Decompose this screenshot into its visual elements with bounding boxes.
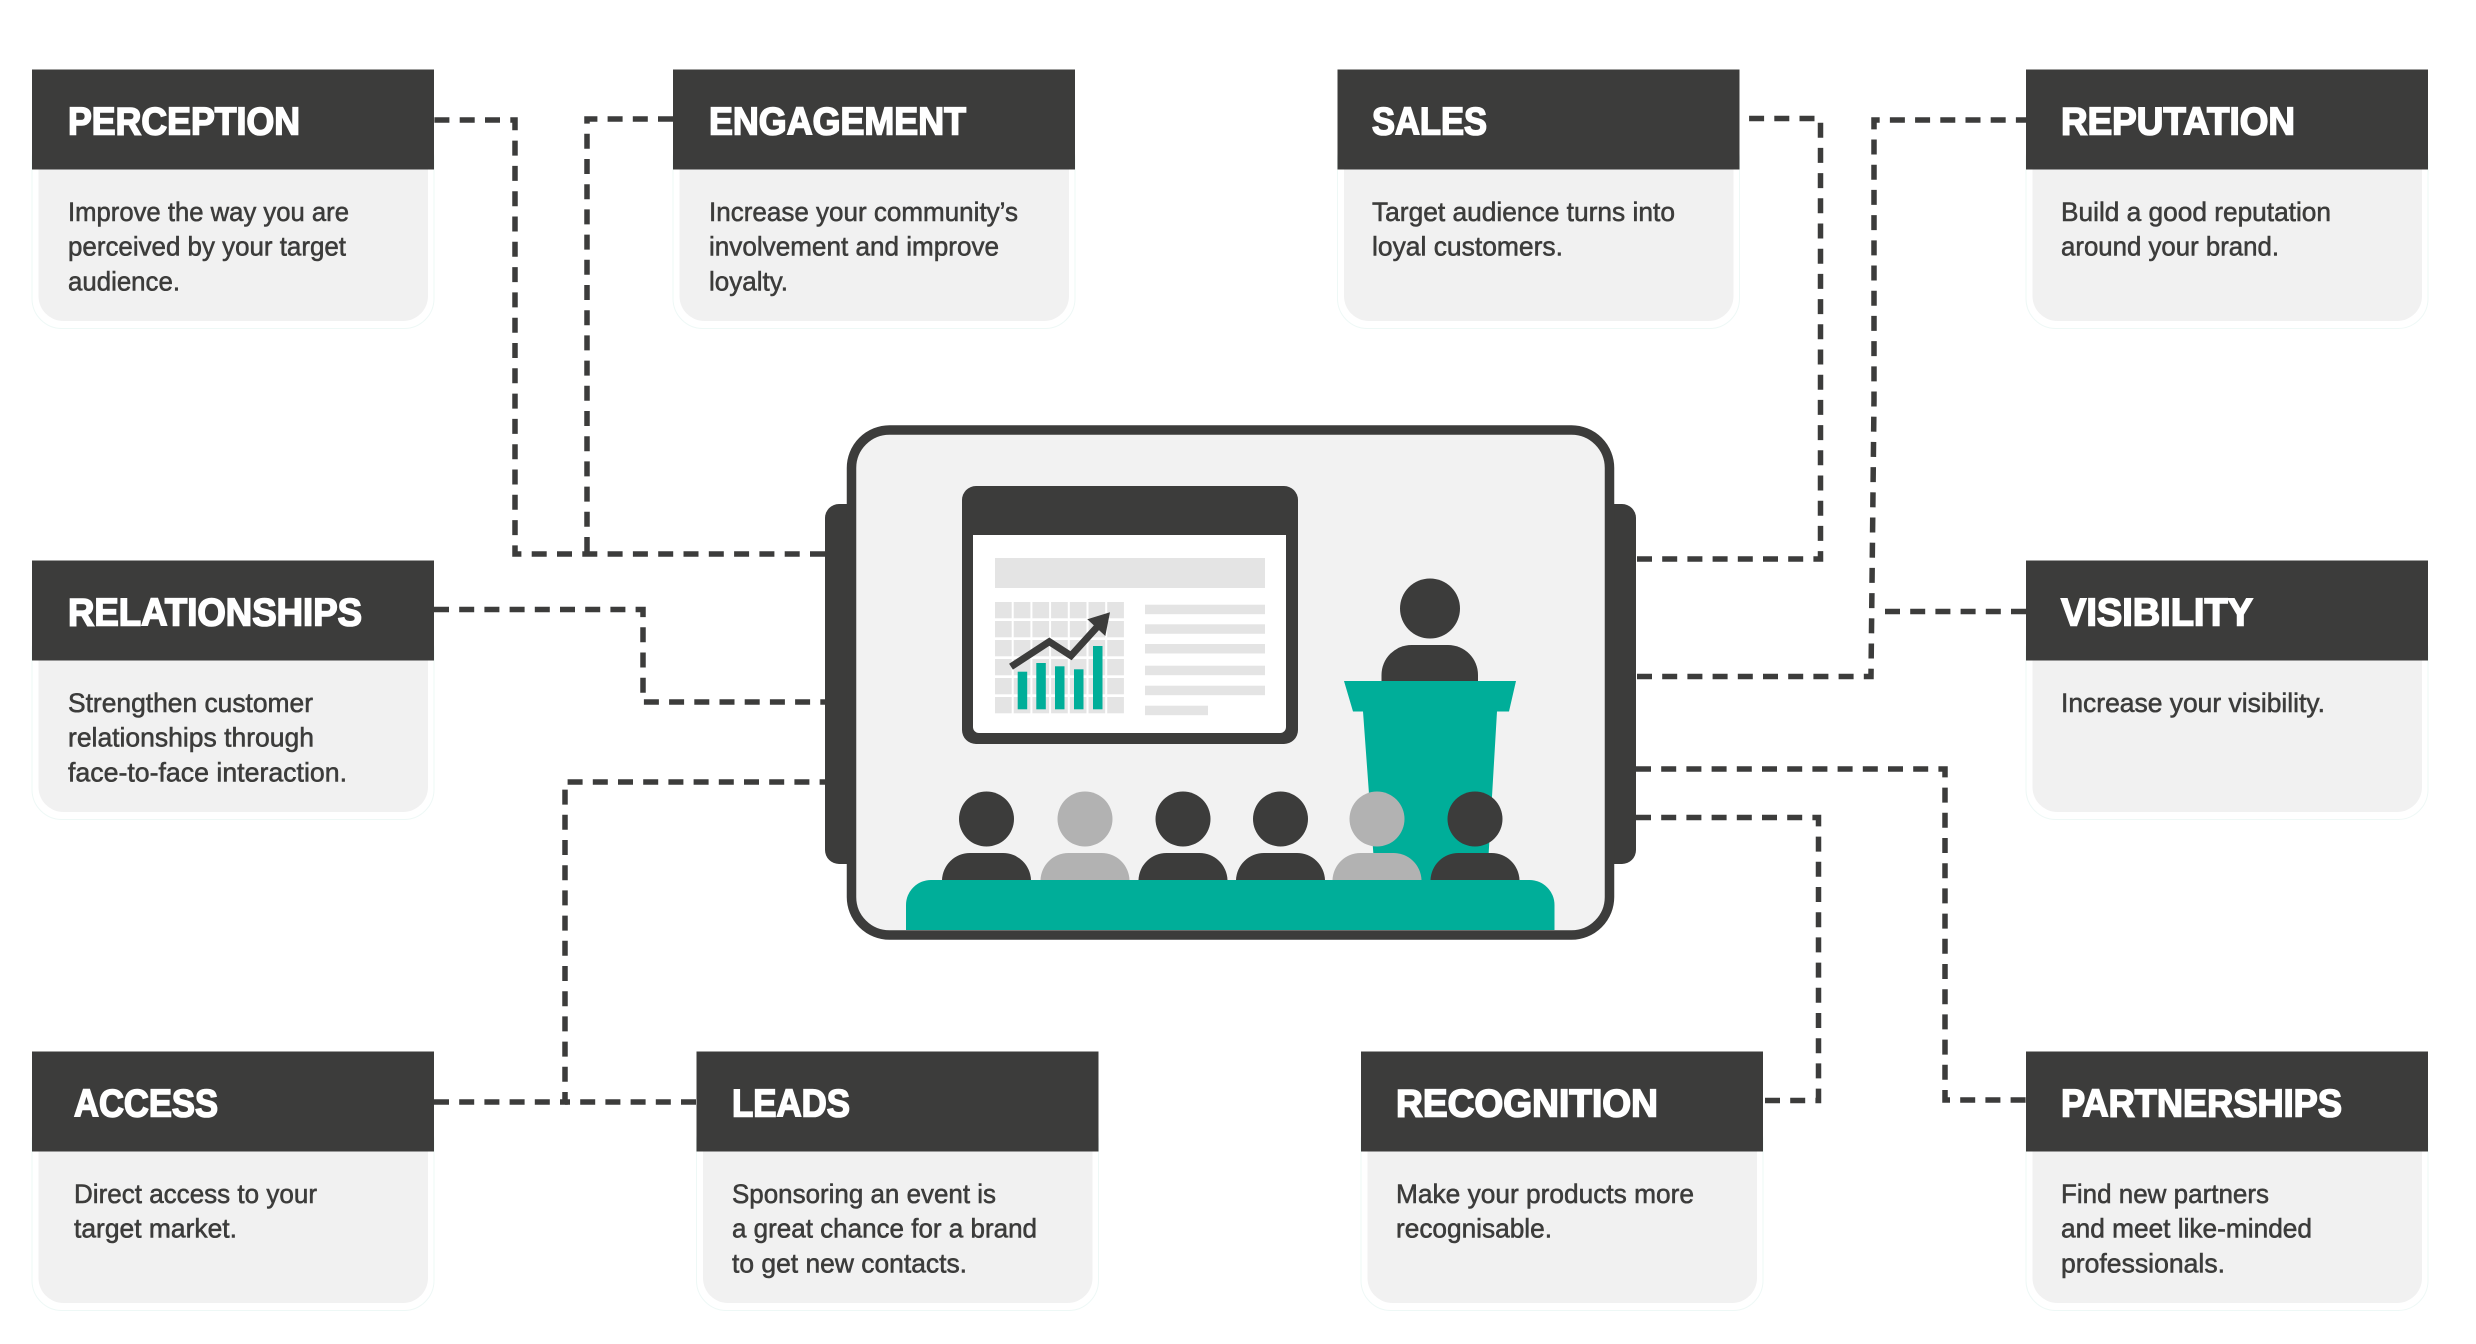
- connector: visibility: [1884, 609, 2026, 614]
- text: relationships description: relationships through: [68, 722, 314, 752]
- heading: partnerships: PARTNERSHIPS: [2061, 1082, 2342, 1126]
- text: access description: Direct access to your: [74, 1179, 317, 1209]
- teal front table: [906, 880, 1554, 930]
- text: perception description: [68, 197, 349, 296]
- text: partnerships description: professionals.: [2061, 1248, 2225, 1278]
- heading: engagement: ENGAGEMENT: [709, 100, 966, 144]
- text: partnerships description: and meet like-minded: [2061, 1214, 2312, 1244]
- text: relationships description: face-to-face interaction.: [68, 758, 347, 788]
- frame: [852, 430, 1610, 935]
- connector: perception: [434, 120, 825, 554]
- rising trend arrow: [1011, 612, 1110, 667]
- text: recognition description: Make your products more: [1396, 1179, 1694, 1209]
- card: perception: [32, 70, 434, 328]
- text: sales description: loyal customers.: [1372, 232, 1563, 262]
- text: reputation description: Build a good reputation: [2061, 197, 2331, 227]
- heading: perception: PERCEPTION: [68, 100, 300, 144]
- text: reputation description: around your brand.: [2061, 232, 2279, 262]
- heading: leads: LEADS: [732, 1082, 850, 1126]
- heading: access: ACCESS: [74, 1082, 218, 1126]
- connector: leads: [565, 1099, 696, 1105]
- card: access: [32, 1052, 434, 1310]
- text: sales description: Target audience turns into: [1372, 197, 1675, 227]
- text: relationships description: Strengthen customer: [68, 688, 313, 718]
- text placeholder lines: [1145, 605, 1265, 715]
- text: recognition description: [1396, 1179, 1694, 1244]
- text: leads description: to get new contacts.: [732, 1248, 967, 1278]
- card: engagement: [673, 70, 1075, 328]
- text: reputation description: [2061, 197, 2331, 262]
- connector: reputation: [1637, 120, 2026, 676]
- side tabs: [825, 504, 1636, 864]
- slide header bar: [995, 558, 1265, 588]
- heading: reputation: REPUTATION: [2061, 100, 2295, 144]
- text: leads description: Sponsoring an event is: [732, 1179, 996, 1209]
- text: partnerships description: [2061, 1179, 2312, 1278]
- card: visibility: [2026, 560, 2428, 820]
- connector: access: [434, 782, 825, 1102]
- projection monitor: [962, 486, 1298, 744]
- text: recognition description: recognisable.: [1396, 1214, 1552, 1244]
- connector: partnerships: [1636, 769, 2026, 1100]
- card: leads: [696, 1052, 1098, 1310]
- text: visibility description: Increase your visibility.: [2061, 688, 2325, 718]
- connector: relationships: [434, 610, 825, 702]
- text: engagement description: Increase your community’s: [709, 197, 1018, 227]
- text: perception description: Improve the way you are: [68, 197, 349, 227]
- central illustration: presentation screen: [825, 430, 1636, 935]
- card: sales: [1338, 70, 1740, 328]
- text: access description: [74, 1179, 317, 1244]
- heading: recognition: RECOGNITION: [1396, 1082, 1658, 1126]
- text: engagement description: loyalty.: [709, 266, 788, 296]
- card: reputation: [2026, 70, 2428, 328]
- text: partnerships description: Find new partners: [2061, 1179, 2269, 1209]
- text: engagement description: [709, 197, 1018, 296]
- text: sales description: [1372, 197, 1675, 262]
- text: relationships description: [68, 688, 347, 788]
- text: engagement description: involvement and improve: [709, 232, 999, 262]
- text: access description: target market.: [74, 1214, 237, 1244]
- card: relationships: [32, 560, 434, 820]
- connector: engagement: [587, 119, 673, 554]
- speaker at lectern: [1344, 578, 1516, 890]
- text: perception description: perceived by your target: [68, 232, 347, 262]
- connector: sales: [1637, 118, 1820, 559]
- teal bars: [1018, 646, 1102, 709]
- text: perception description: audience.: [68, 266, 180, 296]
- card: recognition: [1361, 1052, 1763, 1310]
- heading: sales: SALES: [1372, 100, 1487, 144]
- heading: visibility: VISIBILITY: [2061, 592, 2253, 634]
- text: leads description: [732, 1179, 1037, 1278]
- grid background: [995, 602, 1124, 713]
- connector: recognition: [1636, 818, 1818, 1100]
- text: leads description: a great chance for a brand: [732, 1214, 1037, 1244]
- audience: [942, 792, 1520, 881]
- card: partnerships: [2026, 1052, 2428, 1310]
- heading: relationships: RELATIONSHIPS: [68, 592, 362, 634]
